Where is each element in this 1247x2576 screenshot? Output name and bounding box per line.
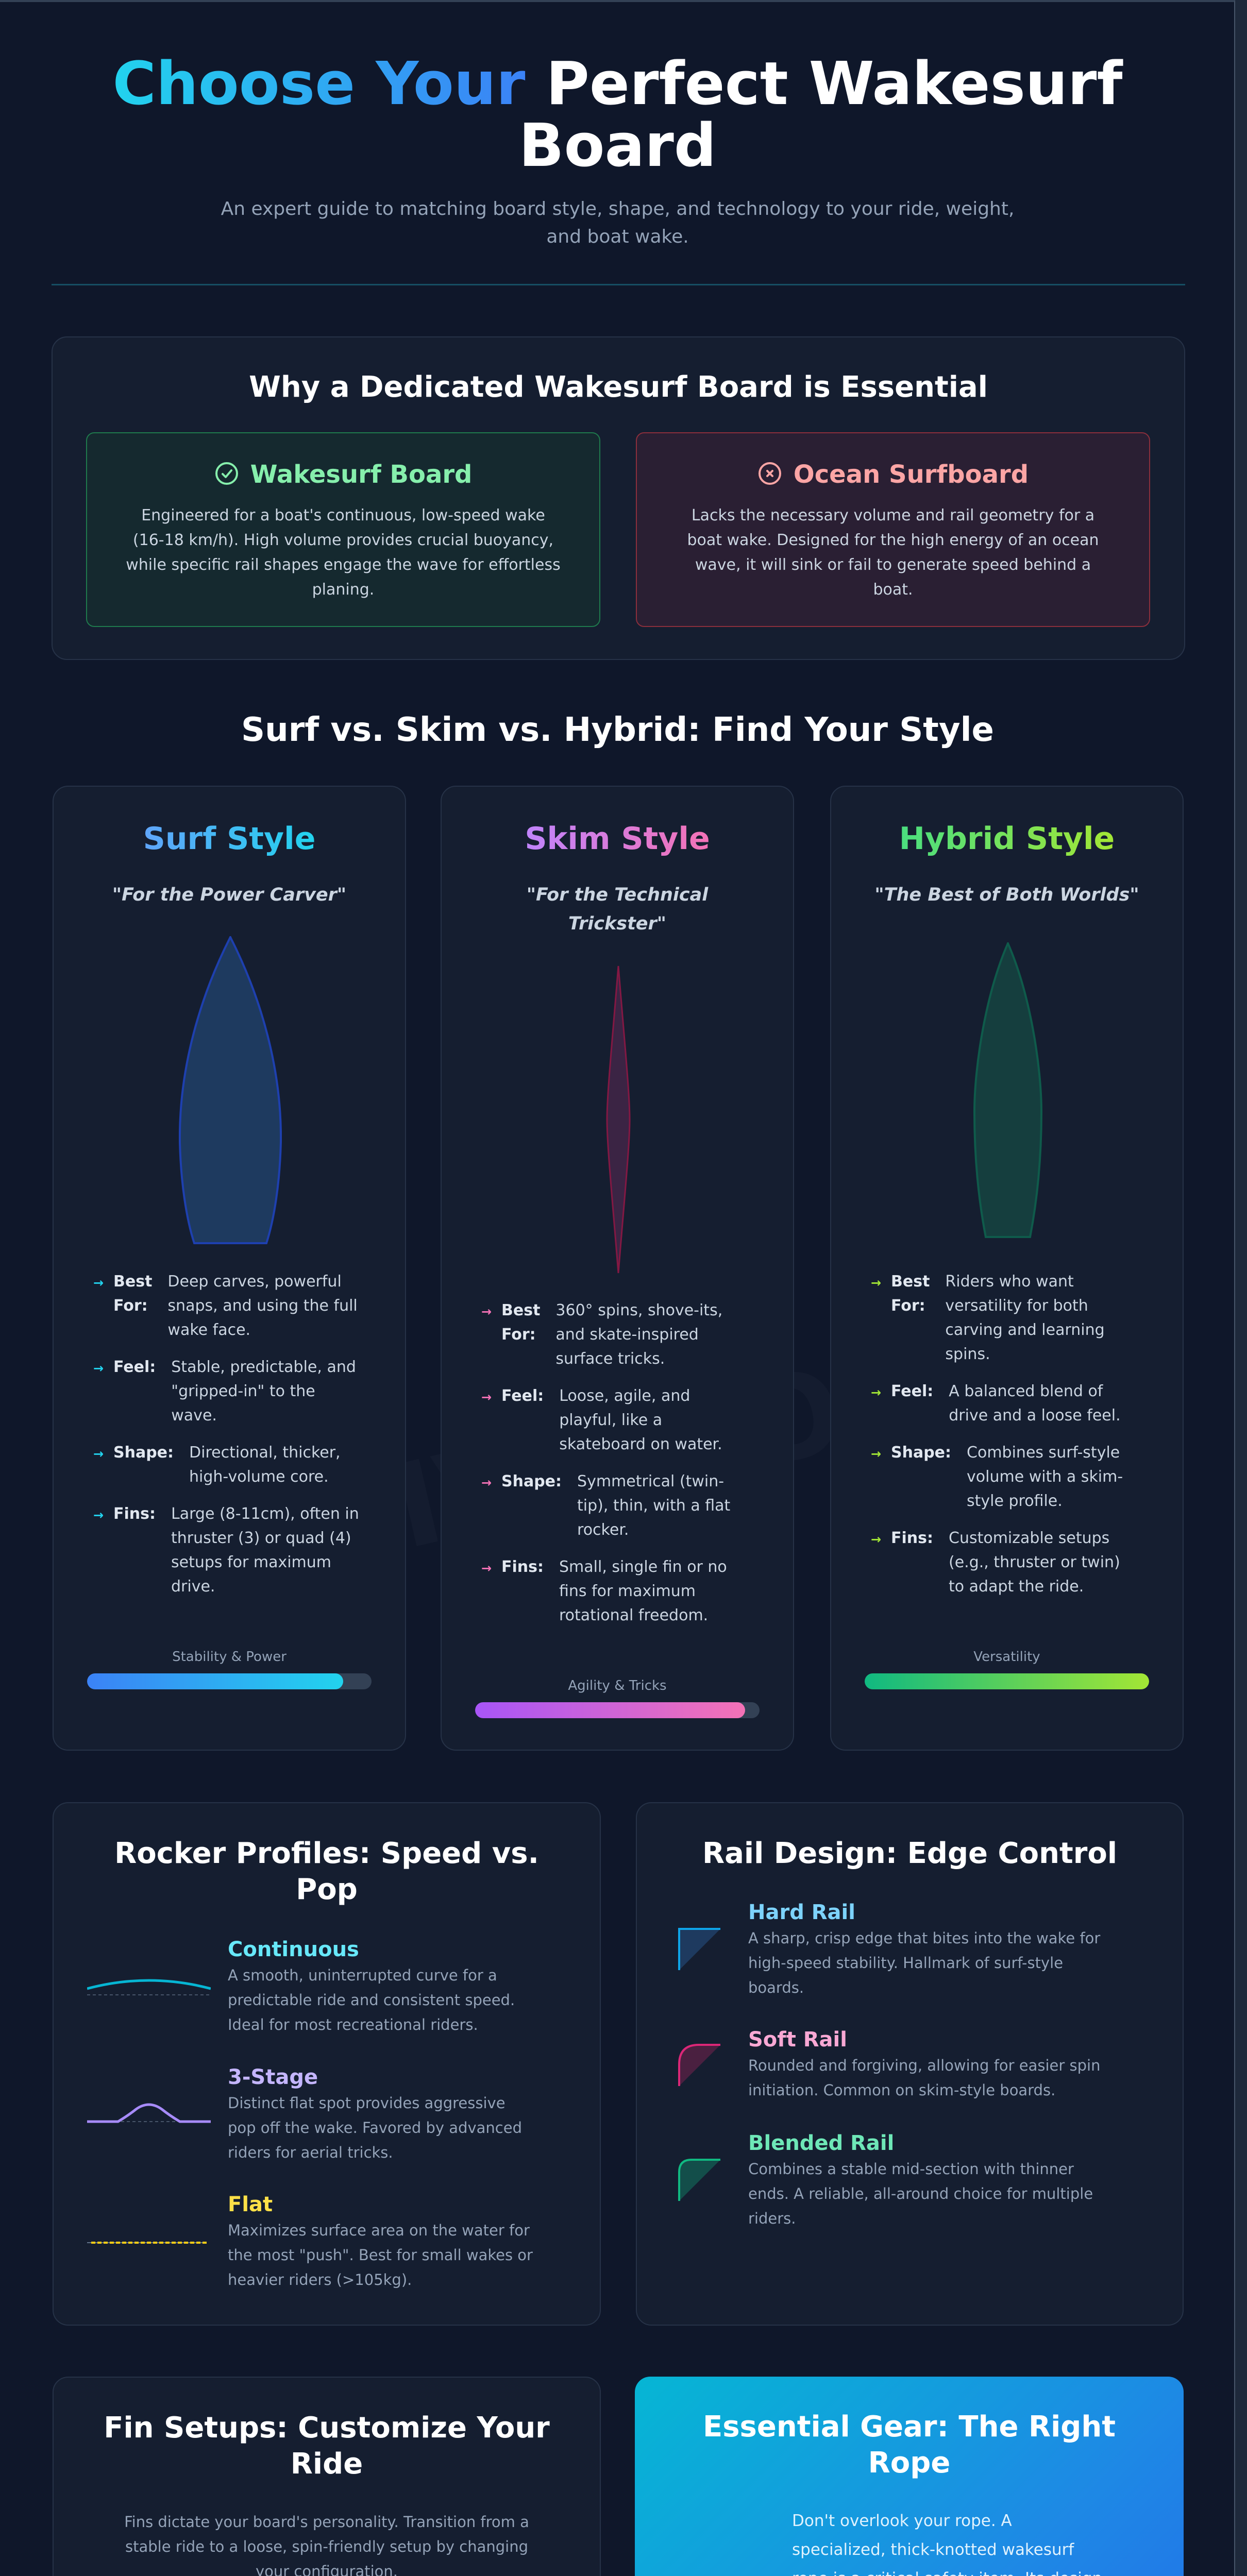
surf list: For:: [113, 1297, 148, 1315]
heading: rope: Rope: [868, 2446, 950, 2480]
item: continuous: A smooth, uninterrupted curve for a: [228, 1967, 497, 1984]
subtitle: and boat wake.: [546, 226, 689, 247]
skim list: Fins:: [501, 1558, 544, 1576]
item: blended rail: ends. A reliable, all-around choice for multiple: [748, 2185, 1093, 2202]
hybrid title: Hybrid Style: [899, 821, 1115, 857]
hybrid list: carving and learning: [945, 1321, 1105, 1339]
item: 3-stage: pop off the wake. Favored by advanced: [228, 2119, 522, 2137]
hybrid list: Fins:: [891, 1529, 933, 1547]
heading: rope: [635, 2409, 1184, 2481]
icon: surf board: [179, 936, 282, 1244]
item: hard rail: A sharp, crisp edge that bites into the wake for: [748, 1929, 1100, 1947]
surf list: →: [93, 1276, 104, 1290]
hybrid list: drive and a loose feel.: [949, 1406, 1121, 1425]
hybrid list: For:: [891, 1297, 925, 1315]
item: hard rail: [678, 1901, 1101, 1996]
item: hard rail: Hard Rail: [748, 1901, 855, 1924]
surf list: wake face.: [167, 1321, 250, 1339]
card text: [687, 506, 1099, 599]
item: 3-stage: riders for aerial tricks.: [228, 2144, 393, 2161]
heading: rocker: Rocker Profiles: Speed vs.: [114, 1837, 539, 1870]
hybrid list: →: [871, 1276, 881, 1290]
heading: styles: Surf vs. Skim vs. Hybrid: Find Your Style: [241, 711, 994, 749]
panel: fin setups: [53, 2377, 601, 2576]
hybrid list: Customizable setups: [949, 1529, 1109, 1547]
icon: continuous curve: [87, 1979, 211, 1995]
surf list: →: [93, 1508, 104, 1522]
panel: rocker profiles: [53, 1802, 601, 2326]
item: soft rail: [678, 2026, 1101, 2103]
hybrid list: versatility for both: [945, 1297, 1088, 1315]
hybrid list: Feel:: [891, 1382, 933, 1400]
surf list: Best: [113, 1273, 152, 1291]
panel: essential gear rope: [635, 2377, 1184, 2576]
card text: boat.: [873, 581, 913, 599]
card text: (16-18 km/h). High volume provides crucial buoyancy,: [133, 531, 553, 549]
hybrid list: to adapt the ride.: [949, 1578, 1084, 1596]
surf list: Large (8-11cm), often in: [171, 1505, 359, 1523]
heading: rope: Essential Gear: The Right: [703, 2410, 1116, 2444]
surf list: thruster (3) or quad (4): [171, 1529, 351, 1547]
item: blended rail: Combines a stable mid-section with thinner: [748, 2160, 1074, 2178]
item: blended rail: riders.: [748, 2210, 796, 2227]
item: flat: the most "push". Best for small wakes or: [228, 2246, 533, 2264]
item: soft rail: Soft Rail: [748, 2028, 847, 2052]
skim list: Small, single fin or no: [559, 1558, 727, 1576]
surf tagline: "For the Power Carver": [112, 885, 346, 905]
icon: soft rail: [678, 2044, 721, 2087]
item: flat: [87, 2193, 533, 2289]
hybrid list: volume with a skim-: [967, 1468, 1123, 1486]
panel: skim style: [441, 786, 794, 1751]
hybrid list: Best: [891, 1273, 930, 1291]
skim list: 360° spins, shove-its,: [555, 1301, 722, 1319]
item: hard rail: high-speed stability. Hallmark of surf-style: [748, 1954, 1063, 1972]
skim list: fins for maximum: [559, 1582, 696, 1600]
item: continuous: Continuous: [228, 1938, 359, 1961]
skim list: surface tricks.: [555, 1350, 665, 1368]
hybrid list: Shape:: [891, 1444, 951, 1462]
item: flat: heavier riders (>105kg).: [228, 2271, 412, 2289]
hybrid list: A balanced blend of: [949, 1382, 1103, 1400]
surf list: [93, 1273, 359, 1596]
hybrid tagline: "The Best of Both Worlds": [874, 885, 1139, 905]
card text: wave, it will sink or fail to generate speed behind a: [695, 556, 1091, 574]
surf list: Directional, thicker,: [189, 1444, 341, 1462]
heading: rocker: [114, 1837, 539, 1906]
surf list: snaps, and using the full: [167, 1297, 358, 1315]
panel: why a dedicated board: [52, 336, 1185, 660]
card text: planing.: [312, 581, 374, 599]
item: continuous: predictable ride and consistent speed.: [228, 1991, 515, 2009]
panel: surf style: [53, 786, 406, 1751]
item: soft rail: initiation. Common on skim-style boards.: [748, 2081, 1055, 2099]
surf list: Fins:: [113, 1505, 156, 1523]
skim list: skateboard on water.: [559, 1435, 722, 1453]
item: blended rail: [678, 2130, 1093, 2231]
panel: hybrid style: [830, 786, 1184, 1751]
icon: skim board: [606, 965, 631, 1274]
heading: fins: Fin Setups: Customize Your: [104, 2411, 550, 2445]
title: Board: [519, 111, 716, 180]
card text: boat wake. Designed for the high energy of an ocean: [687, 531, 1099, 549]
skim tagline: Trickster": [568, 913, 666, 934]
skim list: Shape:: [501, 1472, 562, 1490]
item: 3-stage: 3-Stage: [228, 2065, 318, 2089]
bar: stability & power: Stability & Power: [172, 1649, 287, 1665]
item: continuous: [87, 1938, 515, 2033]
icon: hybrid board: [973, 942, 1042, 1238]
hybrid list: [871, 1273, 1123, 1596]
skim list: →: [481, 1390, 492, 1404]
hybrid list: style profile.: [967, 1492, 1063, 1510]
title: Choose Your Perfect Wakesurf: [112, 49, 1123, 118]
surf list: setups for maximum: [171, 1553, 331, 1571]
hybrid list: Riders who want: [945, 1273, 1074, 1291]
skim list: For:: [501, 1326, 536, 1344]
icon: hard rail: [678, 1928, 720, 1970]
skim list: and skate-inspired: [555, 1326, 699, 1344]
hybrid list: →: [871, 1447, 881, 1461]
card heading: ocean surfboard: Ocean Surfboard: [794, 460, 1029, 489]
card: ocean surfboard: [636, 432, 1150, 627]
surf list: Feel:: [113, 1358, 156, 1376]
surf list: Deep carves, powerful: [167, 1273, 342, 1291]
rope text: Don't overlook your rope. A: [792, 2512, 1012, 2530]
item: hard rail: boards.: [748, 1979, 804, 1996]
heading: why: Why a Dedicated Wakesurf Board is Essential: [249, 370, 988, 404]
item: continuous: Ideal for most recreational riders.: [228, 2016, 478, 2033]
surf list: high-volume core.: [189, 1468, 329, 1486]
item: 3-stage: [87, 2065, 522, 2161]
hybrid list: Combines surf-style: [967, 1444, 1120, 1462]
heading: fins: [54, 2410, 600, 2482]
card text: Engineered for a boat's continuous, low-speed wake: [141, 506, 545, 524]
bar: versatility: Versatility: [973, 1649, 1040, 1665]
card text: [126, 506, 561, 599]
panel: rail design: [636, 1802, 1184, 2326]
fins description: Fins dictate your board's personality. Transition from a: [124, 2513, 529, 2531]
item: flat: Maximizes surface area on the water for: [228, 2222, 530, 2239]
heading: rocker: Pop: [296, 1873, 358, 1906]
surf list: "gripped-in" to the: [171, 1382, 315, 1400]
skim list: rocker.: [577, 1521, 629, 1539]
skim list: playful, like a: [559, 1411, 662, 1429]
subtitle: An expert guide to matching board style, shape, and technology to your ride, weight,: [221, 198, 1014, 219]
surf list: Stable, predictable, and: [171, 1358, 356, 1376]
heading: fins: Ride: [291, 2447, 363, 2481]
heading: rail: Rail Design: Edge Control: [702, 1837, 1117, 1870]
skim list: tip), thin, with a flat: [577, 1497, 730, 1515]
item: flat: Flat: [228, 2193, 273, 2216]
title: [112, 49, 1123, 180]
surf list: →: [93, 1447, 104, 1461]
item: 3-stage: Distinct flat spot provides aggressive: [228, 2094, 505, 2112]
skim tagline: "For the Technical: [527, 885, 708, 905]
skim list: Feel:: [501, 1387, 544, 1405]
skim list: →: [481, 1476, 492, 1490]
bar: agility & tricks: Agility & Tricks: [568, 1678, 667, 1693]
subtitle: [221, 198, 1014, 247]
card text: Lacks the necessary volume and rail geometry for a: [692, 506, 1094, 524]
surf list: Shape:: [113, 1444, 174, 1462]
watermark: DIVO.COM.AU: [289, 1265, 1187, 1597]
hybrid list: →: [871, 1385, 881, 1400]
skim list: Best: [501, 1301, 540, 1319]
skim tagline: [527, 885, 709, 934]
surf list: →: [93, 1361, 104, 1376]
icon: 3-stage curve: [87, 2103, 211, 2123]
icon: blended rail: [678, 2159, 721, 2202]
fins description: [54, 2510, 600, 2576]
skim list: →: [481, 1561, 492, 1575]
surf title: Surf Style: [143, 821, 315, 857]
skim list: Loose, agile, and: [559, 1387, 690, 1405]
rope text: [792, 2506, 1102, 2576]
skim title: Skim Style: [525, 821, 710, 857]
item: soft rail: Rounded and forgiving, allowing for easier spin: [748, 2057, 1101, 2074]
fins description: stable ride to a loose, spin-friendly setup by changing: [125, 2538, 528, 2555]
skim list: [481, 1301, 730, 1624]
card text: while specific rail shapes engage the wave for effortless: [126, 556, 561, 574]
card: wakesurf board: [86, 432, 600, 627]
hybrid list: →: [871, 1532, 881, 1547]
skim list: rotational freedom.: [559, 1606, 708, 1624]
surf list: wave.: [171, 1406, 217, 1425]
skim list: →: [481, 1304, 492, 1319]
card heading: wakesurf board: Wakesurf Board: [250, 460, 472, 489]
hybrid list: spins.: [945, 1345, 990, 1363]
icon: flat line: [87, 2242, 207, 2244]
item: blended rail: Blended Rail: [748, 2131, 894, 2155]
skim list: Symmetrical (twin-: [577, 1472, 724, 1490]
surf list: drive.: [171, 1578, 215, 1596]
rope text: specialized, thick-knotted wakesurf: [792, 2540, 1074, 2559]
hybrid list: (e.g., thruster or twin): [949, 1553, 1120, 1571]
